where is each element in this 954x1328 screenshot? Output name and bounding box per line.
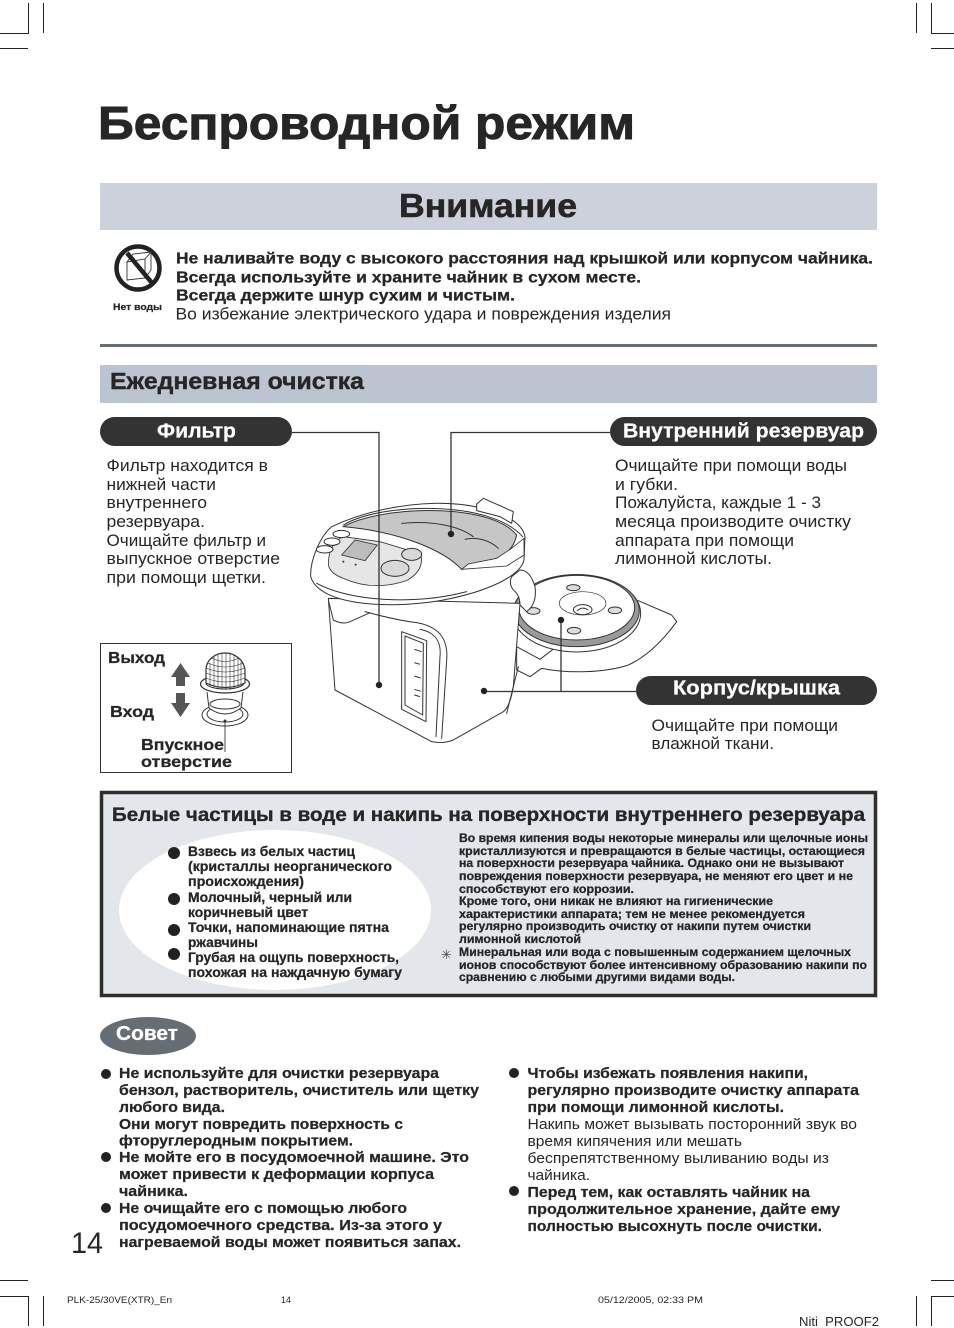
attention banner: Внимание [399,187,577,224]
body text: влажной ткани. [652,734,774,753]
head [311,503,525,605]
leader lines [292,432,636,692]
tab [477,498,513,523]
filter text: Очищайте фильтр и [106,531,266,550]
illustration: kettle and lid [311,498,677,743]
icon: no water [113,246,162,313]
oval bullet list: Точки, напоминающие пятна [188,920,390,935]
inner tank text: лимонной кислоты. [615,549,772,568]
explanation text: регулярно производить очистку от накипи путем очистки [459,921,811,933]
oval bullet list: Взвесь из белых частиц [188,844,356,859]
tips: right column: Чтобы избежать появления накипи, [528,1065,808,1082]
tips: left column: бензол, растворитель, очиститель или щетку [119,1082,480,1099]
pill: filter [100,417,292,446]
oval bullet list: похожая на наждачную бумагу [188,965,402,980]
oval bullet list [119,830,431,990]
oval bullet list: ржавчины [188,935,258,950]
filter text: нижней части [106,475,216,494]
inner tank text: месяца производите очистку [615,512,852,531]
panel: white particles [102,792,876,996]
tips: left column: Они могут повредить поверхность с [119,1116,403,1133]
inner tank text: и губки. [615,475,678,494]
oval bullet list: происхождения) [188,874,304,889]
filter text: при помощи щетки. [106,568,266,587]
panel: filter detail [100,644,292,772]
tips: right column: регулярно производите очистку аппарата [528,1082,860,1099]
inner tank text: Пожалуйста, каждые 1 - 3 [615,493,821,512]
pill: body and lid [636,676,877,705]
tips: right column: чайника. [528,1167,590,1184]
explanation text [441,833,868,984]
panel: filter detail: Выход [108,650,165,667]
lid [513,575,677,677]
tips: right column [509,1065,860,1235]
pill: filter: Фильтр [157,420,236,442]
tips: left column: Не очищайте его с помощью любого [119,1200,407,1217]
explanation text: способствуют его коррозии. [459,884,634,896]
body text [652,716,838,753]
inner tank text [615,456,852,568]
tips: left column: чайника. [119,1183,188,1200]
tips: right column: продолжительное хранение, дайте ему [528,1201,841,1218]
filter text [106,456,280,587]
tips: right column: полностью высохнуть после очистки. [528,1218,822,1235]
pill: inner tank [610,417,877,446]
inner tank text: Очищайте при помощи воды [615,456,847,475]
daily cleaning heading: Ежедневная очистка [110,368,364,394]
filter text: резервуара. [106,512,205,531]
explanation text: характеристики аппарата; тем не менее рекомендуется [459,909,805,921]
footer: PLK-25/30VE(XTR)_En [67,1295,172,1306]
tip badge [100,1017,196,1055]
warning text [176,250,873,324]
tips: left column: посудомоечного средства. Из-за этого у [119,1217,443,1234]
warning text: Всегда используйте и храните чайник в сухом месте. [176,270,641,286]
handle [510,570,535,612]
pill: inner tank: Внутренний резервуар [623,420,864,442]
water level window [402,632,427,722]
oval bullet list: Грубая на ощупь поверхность, [188,950,399,965]
tips: left column: может привести к деформации корпуса [119,1166,435,1183]
tips: right column: Перед тем, как оставлять чайник на [528,1184,811,1201]
body text: Очищайте при помощи [652,716,838,735]
inner tank text: аппарата при помощи [615,531,794,550]
warning text: Не наливайте воду с высокого расстояния над крышкой или корпусом чайника. [176,250,873,268]
body [328,598,520,743]
tank [343,511,517,569]
tip badge: Совет [116,1023,178,1045]
tips: left column: фторуглеродным покрытием. [119,1132,353,1150]
panel: white particles: Белые частицы в воде и накипь на поверхности внутреннего резервуара [112,805,865,826]
daily cleaning heading [100,365,877,403]
panel: filter detail: Вход [110,704,154,721]
filter text: внутреннего [106,493,207,512]
explanation text: на поверхности резервуара чайника. Однако они не вызывают [459,858,844,870]
explanation text: Кроме того, они никак не влияют на гигиенические [459,896,773,908]
tips: right column: беспрепятственному выливанию воды из [528,1150,829,1167]
panel: filter detail: Впускное [141,737,224,754]
explanation text: ✳ [441,948,452,963]
oval bullet list: Молочный, черный или [188,890,352,905]
attention banner [100,183,877,230]
oval bullet list: (кристаллы неорганического [188,859,392,874]
tips: right column: время кипячения или мешать [528,1133,742,1150]
footer: 14 [281,1295,291,1306]
pill: body and lid: Корпус/крышка [673,678,841,700]
icon: no water: Нет воды [113,302,162,313]
explanation text: повреждения поверхности резервуара, не меняют его цвет и не [459,871,853,883]
filter text: выпускное отверстие [106,549,280,568]
explanation text: Во время кипения воды некоторые минералы или щелочные ионы [459,833,868,845]
oval bullet list: коричневый цвет [188,905,308,920]
explanation text: кристаллизуются и превращаются в белые частицы, остающиеся [459,846,865,858]
footer: 05/12/2005, 02:33 PM [598,1295,703,1306]
title: Беспроводной режим [98,97,635,149]
arrow: down [171,693,190,717]
panel: filter detail: отверстие [141,754,232,771]
tips: left column: нагреваемой воды может появиться запах. [119,1234,461,1251]
filter text: Фильтр находится в [106,456,268,475]
tips: left column [101,1065,480,1251]
control panel [328,537,421,586]
explanation text: лимонной кислотой [459,934,581,946]
arrow: up [171,663,190,686]
warning text: Во избежание электрического удара и повреждения изделия [176,306,671,324]
tips: left column: любого вида. [119,1099,225,1116]
explanation text: Минеральная или вода с повышенным содержанием щелочных [459,947,852,959]
page number: 14 [71,1227,103,1260]
tips: right column: Накипь может вызывать посторонний звук во [528,1116,857,1133]
warning text: Всегда держите шнур сухим и чистым. [176,288,515,304]
explanation text: ионов способствуют более интенсивному образованию накипи по [459,960,867,972]
icon: mesh filter [200,653,250,726]
tips: left column: Не мойте его в посудомоечной машине. Это [119,1149,469,1166]
explanation text: сравнению с любыми другими видами воды. [459,972,735,984]
tips: left column: Не используйте для очистки резервуара [119,1065,440,1082]
footer [67,1295,879,1328]
tips: right column: при помощи лимонной кислоты. [528,1099,784,1116]
